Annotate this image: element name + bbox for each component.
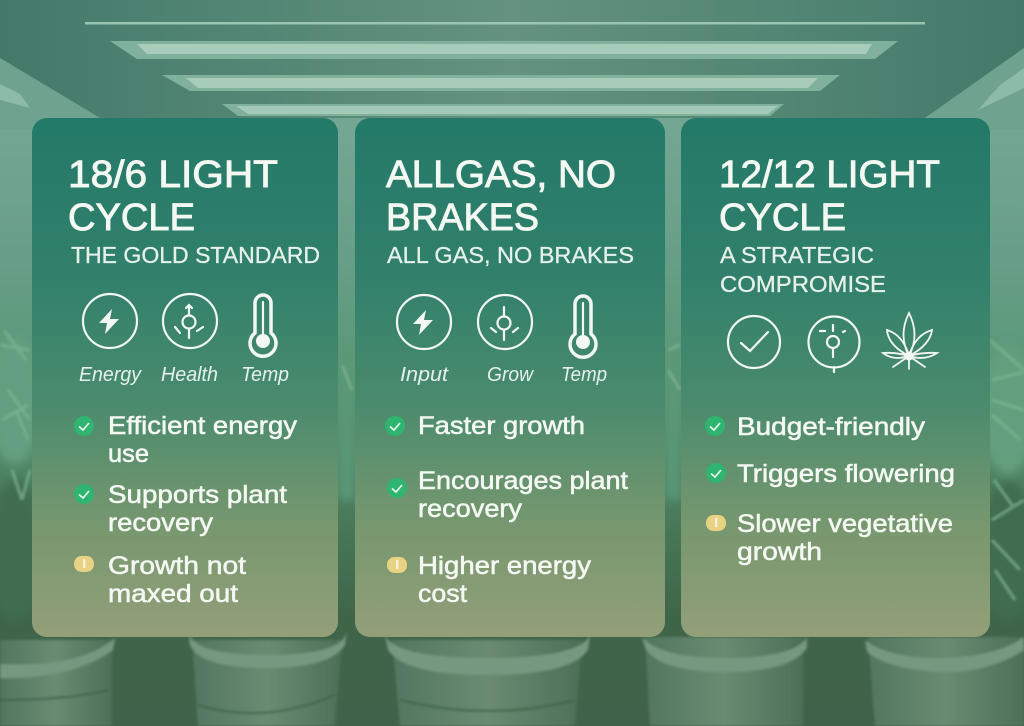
bullet: growth not maxed out: Growth not bbox=[108, 552, 246, 580]
bullet: supports plant recovery: recovery bbox=[108, 509, 214, 537]
icon: health bbox=[161, 294, 218, 386]
bullet: higher energy cost: Higher energy bbox=[418, 552, 592, 580]
heading bbox=[719, 154, 940, 239]
bullet: encourages plant recovery: recovery bbox=[418, 495, 523, 523]
bullet: slower vegetative growth bbox=[706, 510, 953, 566]
heading: 18/6 LIGHT bbox=[68, 154, 278, 196]
heading bbox=[68, 154, 278, 239]
icon: health: Health bbox=[161, 364, 218, 386]
icon: thermometer: Temp bbox=[241, 364, 289, 386]
bullet: higher energy cost: cost bbox=[418, 580, 467, 608]
panel: 18/6 light cycle bbox=[32, 118, 338, 637]
icon: check bbox=[728, 316, 780, 368]
bullet: budget-friendly: Budget-friendly bbox=[737, 413, 926, 441]
heading: BRAKES bbox=[386, 197, 539, 239]
bullet: slower vegetative growth: Slower vegetative bbox=[737, 510, 953, 538]
panel: all gas, no brakes bbox=[355, 118, 665, 637]
icon: energy: Energy bbox=[79, 364, 142, 386]
plants: blurred foliage bbox=[0, 335, 1024, 620]
icon: energy bbox=[79, 294, 142, 386]
icon: input bbox=[397, 295, 451, 386]
icon: thermometer bbox=[241, 295, 289, 386]
bullet: faster growth: Faster growth bbox=[418, 412, 585, 440]
icon: bulb bbox=[808, 316, 860, 372]
icon: grow: Grow bbox=[487, 364, 534, 386]
bullet: efficient energy use: Efficient energy bbox=[108, 412, 298, 440]
heading bbox=[386, 154, 616, 239]
heading: 12/12 LIGHT bbox=[719, 154, 940, 196]
bullet: encourages plant recovery bbox=[387, 467, 628, 523]
bullet: efficient energy use: use bbox=[108, 440, 149, 468]
bullet: slower vegetative growth: growth bbox=[737, 538, 822, 566]
icon: grow bbox=[478, 295, 534, 386]
bullet: encourages plant recovery: Encourages plant bbox=[418, 467, 628, 495]
subheading: COMPROMISE bbox=[720, 271, 886, 297]
icon: thermometer: Temp bbox=[561, 364, 607, 386]
subheading: THE GOLD STANDARD bbox=[71, 242, 320, 268]
icon: input: Input bbox=[400, 364, 450, 386]
bullet: higher energy cost bbox=[387, 552, 592, 608]
bullet: triggers flowering: Triggers flowering bbox=[737, 460, 955, 488]
heading: CYCLE bbox=[719, 197, 846, 239]
bullet: growth not maxed out bbox=[74, 552, 246, 608]
right wall window bbox=[925, 48, 1024, 130]
pots bbox=[0, 630, 1024, 726]
icon: leaf bbox=[883, 313, 937, 369]
subheading: ALL GAS, NO BRAKES bbox=[387, 242, 634, 268]
bullet: efficient energy use bbox=[74, 412, 298, 468]
subheading bbox=[720, 242, 886, 297]
heading: CYCLE bbox=[68, 197, 195, 239]
ceiling bbox=[0, 0, 1024, 118]
heading: ALLGAS, NO bbox=[386, 154, 616, 196]
bullet: supports plant recovery bbox=[74, 481, 287, 537]
icon: thermometer bbox=[561, 296, 607, 386]
bullet: supports plant recovery: Supports plant bbox=[108, 481, 287, 509]
panel: 12/12 light cycle bbox=[681, 118, 990, 637]
ceiling light bars bbox=[85, 22, 925, 24]
subheading: A STRATEGIC bbox=[720, 242, 874, 268]
left wall window bbox=[0, 58, 100, 130]
bullet: growth not maxed out: maxed out bbox=[108, 580, 238, 608]
